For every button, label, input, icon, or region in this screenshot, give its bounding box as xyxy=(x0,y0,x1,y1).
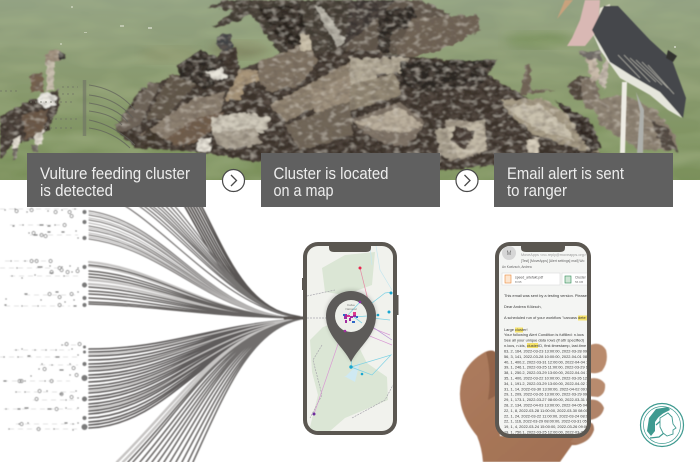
left vulture xyxy=(0,50,66,160)
email body text: Your following Alert Condition is fulfilled: n.locs xyxy=(504,332,584,337)
faded fan lines over photo xyxy=(89,85,135,148)
raised wing bird xyxy=(208,0,480,60)
email body text: 63, 2, 164, 2022-03-23 13:00:00, 2022-03-28 09 xyxy=(504,348,587,354)
email body text xyxy=(504,293,589,434)
photo: vultures and marabou stork on grass xyxy=(0,0,700,180)
email body text: 56, 3, 141, 2022-03-28 10:00:00, 2022-04-01 08 xyxy=(504,354,587,359)
step 1 label: is detected xyxy=(40,181,113,200)
email body text: 22, 1, 24, 2022-03-22 11:00:00, 2022-03-24 08:0 xyxy=(504,413,589,418)
map xyxy=(307,246,393,431)
email body text: 29, 1, 173.1, 2022-03-27 08:00:00, 2022-03-31 0 xyxy=(504,397,589,402)
email body text: 22, 1, 8, 2022-03-28 11:00:00, 2022-03-30 08:00 xyxy=(504,408,589,413)
email body text: 39, 1, 246.1, 2022-03-25 11:00:00, 2022-03-29 1 xyxy=(504,365,588,370)
step 3 label: Email alert is sent xyxy=(507,164,624,183)
email attachments: speed_artefakt.pdf xyxy=(515,276,543,280)
central vulture mass xyxy=(115,15,602,170)
email header: M xyxy=(506,251,512,257)
email attachments: Cluster xyxy=(575,276,587,280)
email body text: 38, 1, 250.2, 2022-03-29 13:00:00, 2022-04-04 1 xyxy=(504,370,588,375)
email body text: 40, 1, 400.2, 2022-03-31 12:00:00, 2022-04-04 1 xyxy=(504,359,588,364)
step 2 label: on a map xyxy=(274,181,334,200)
email header xyxy=(502,246,587,269)
email body text: See all your unique data rows (if attr specified) xyxy=(504,338,585,342)
step 1 label xyxy=(27,153,206,207)
highlighted words xyxy=(515,316,588,348)
step 2 label: Cluster is located xyxy=(274,164,388,183)
arrow button 2 xyxy=(456,170,478,192)
hand holding phone xyxy=(460,344,607,462)
email attachments: 56 KB xyxy=(575,280,583,284)
arrow button 1 xyxy=(222,170,244,192)
phone with cluster map xyxy=(302,242,398,435)
email body text: 31, 1, 14, 2022-03-30 13:00:00, 2022-04-02 09:0 xyxy=(504,386,589,391)
grass background xyxy=(0,0,700,180)
faded data points over photo xyxy=(0,80,84,136)
step 3 label xyxy=(494,153,673,207)
map pin: National xyxy=(345,307,357,311)
email header: MoveApps <no-reply@moveapps.org> xyxy=(521,253,587,257)
email body text: Dear Andrea Kölzsch, xyxy=(504,304,542,309)
step 1 label: Vulture feeding cluster xyxy=(40,164,190,183)
email header: An Koelzsch, Andrea xyxy=(502,265,532,269)
email body text: This email was sent by a testing version. Please xyxy=(504,293,587,298)
email screen xyxy=(499,246,592,434)
email body text: A scheduled run of your workflow "carcass dete xyxy=(504,315,586,320)
step 3 label: to ranger xyxy=(507,181,567,200)
email attachments xyxy=(502,273,592,285)
email header: [Test] [MoveApps] [Alert settings] mail] Wo xyxy=(521,259,585,263)
notch xyxy=(521,246,565,252)
email body text: 22, 1, 116, 2022-03-29 08:00:00, 2022-03-31 05: xyxy=(504,419,588,424)
email body text: 29, 1, 209, 2022-03-26 13:00:00, 2022-03-29 09: xyxy=(504,392,588,397)
map pin: Kafue xyxy=(347,303,355,307)
email body text: 19, 1, 750.1, 2022-03-25 12:00:00, 2022-03-27 0 xyxy=(504,430,589,434)
map pin xyxy=(326,290,376,362)
phone with email alert xyxy=(495,242,592,438)
Max Planck Society Minerva logo xyxy=(640,404,684,446)
email body text: 35, 1, 400, 2022-03-22 10:00:00, 2022-03-26 12: xyxy=(504,376,588,380)
step 2 label xyxy=(261,153,440,207)
email body text: 19, 1, 4, 2022-03-24 15:00:00, 2022-03-26 09:00 xyxy=(504,424,589,429)
email body text: n.locs, n.ids, clusterID, first.timestamp, last.time xyxy=(504,343,586,348)
marabou stork xyxy=(557,0,686,153)
email body text: Large cluster! xyxy=(504,327,528,332)
email attachments: 8 KB xyxy=(515,280,522,284)
scattered detection data points xyxy=(0,208,88,431)
email body text: 28, 2, 134, 2022-04-03 13:00:00, 2022-04-05 04 xyxy=(504,402,588,408)
notch xyxy=(329,246,371,252)
email body text: 34, 1, 191.2, 2022-03-29 13:00:00, 2022-04-02 1 xyxy=(504,381,588,386)
tracking-line fan converging on the map phone xyxy=(89,190,303,462)
small vultures beneath stork xyxy=(567,50,678,152)
